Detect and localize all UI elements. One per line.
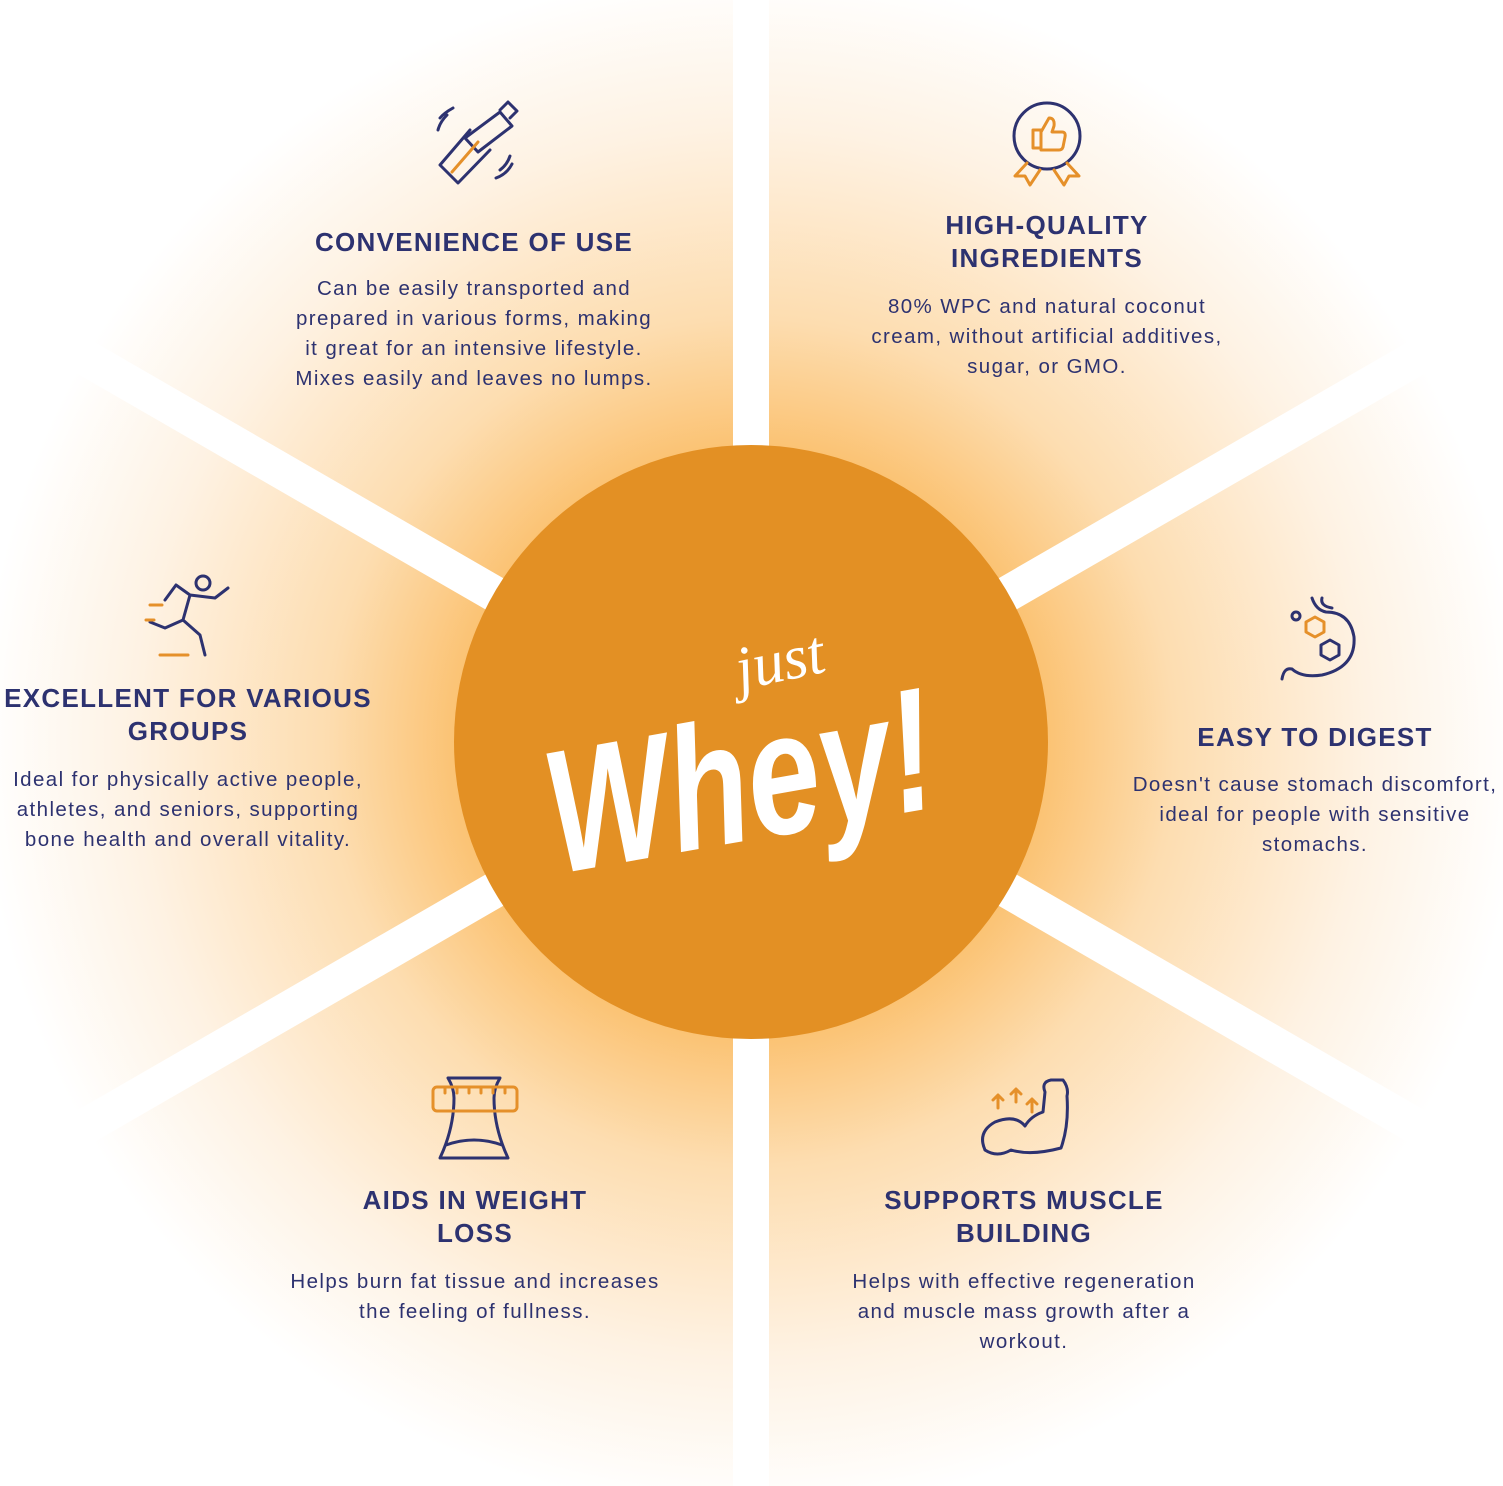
- panel: aids in weight loss: LOSS: [437, 1218, 513, 1248]
- icon: flexed arm: [983, 1080, 1068, 1154]
- panel: aids in weight loss: AIDS IN WEIGHT: [363, 1185, 587, 1215]
- panel: excellent for various groups: [4, 683, 372, 851]
- icon: waist tape: [433, 1078, 517, 1158]
- panel: easy to digest: stomachs.: [1262, 833, 1368, 856]
- panel: aids in weight loss: [290, 1185, 660, 1323]
- center circle logo: Whey!: [531, 652, 949, 911]
- panel: convenience of use: [295, 227, 653, 390]
- center circle logo: [454, 445, 1048, 1039]
- panel: excellent for various groups: GROUPS: [128, 716, 248, 746]
- panel: convenience of use: prepared in various forms, making: [296, 307, 652, 330]
- panel: high-quality ingredients: sugar, or GMO.: [967, 355, 1127, 378]
- panel: high-quality ingredients: INGREDIENTS: [951, 243, 1143, 273]
- panel: convenience of use: Mixes easily and leaves no lumps.: [295, 367, 653, 390]
- panel: excellent for various groups: bone health and overall vitality.: [25, 828, 351, 851]
- panel: supports muscle building: Helps with effective regeneration: [852, 1270, 1196, 1293]
- panel: excellent for various groups: Ideal for physically active people,: [13, 768, 363, 791]
- panel: supports muscle building: workout.: [979, 1330, 1068, 1353]
- icon: shaker: [438, 102, 517, 183]
- panel: easy to digest: Doesn't cause stomach discomfort,: [1133, 773, 1497, 796]
- panel: aids in weight loss: Helps burn fat tissue and increases: [290, 1270, 660, 1293]
- icon: runner: [146, 576, 228, 655]
- panel: high-quality ingredients: cream, without artificial additives,: [871, 325, 1223, 348]
- panel: convenience of use: it great for an intensive lifestyle.: [305, 337, 643, 360]
- panel: aids in weight loss: the feeling of fullness.: [359, 1300, 591, 1323]
- panel: easy to digest: [1133, 722, 1497, 856]
- panel: easy to digest: ideal for people with sensitive: [1159, 803, 1471, 826]
- panel: supports muscle building: SUPPORTS MUSCLE: [884, 1185, 1164, 1215]
- panel: excellent for various groups: athletes, and seniors, supporting: [17, 798, 359, 821]
- panel: high-quality ingredients: 80% WPC and natural coconut: [888, 295, 1206, 318]
- panel: convenience of use: CONVENIENCE OF USE: [315, 227, 633, 257]
- panel: high-quality ingredients: [871, 210, 1223, 378]
- panel: supports muscle building: BUILDING: [956, 1218, 1092, 1248]
- panel: supports muscle building: [852, 1185, 1196, 1353]
- panel: high-quality ingredients: HIGH-QUALITY: [945, 210, 1149, 240]
- panel: convenience of use: Can be easily transported and: [317, 277, 631, 300]
- panel: excellent for various groups: EXCELLENT FOR VARIOUS: [4, 683, 372, 713]
- center circle logo: just: [722, 618, 832, 705]
- panel: supports muscle building: and muscle mass growth after a: [858, 1300, 1190, 1323]
- icon: quality badge: [1014, 103, 1080, 185]
- icon: stomach: [1282, 598, 1354, 679]
- panel: easy to digest: EASY TO DIGEST: [1197, 722, 1433, 752]
